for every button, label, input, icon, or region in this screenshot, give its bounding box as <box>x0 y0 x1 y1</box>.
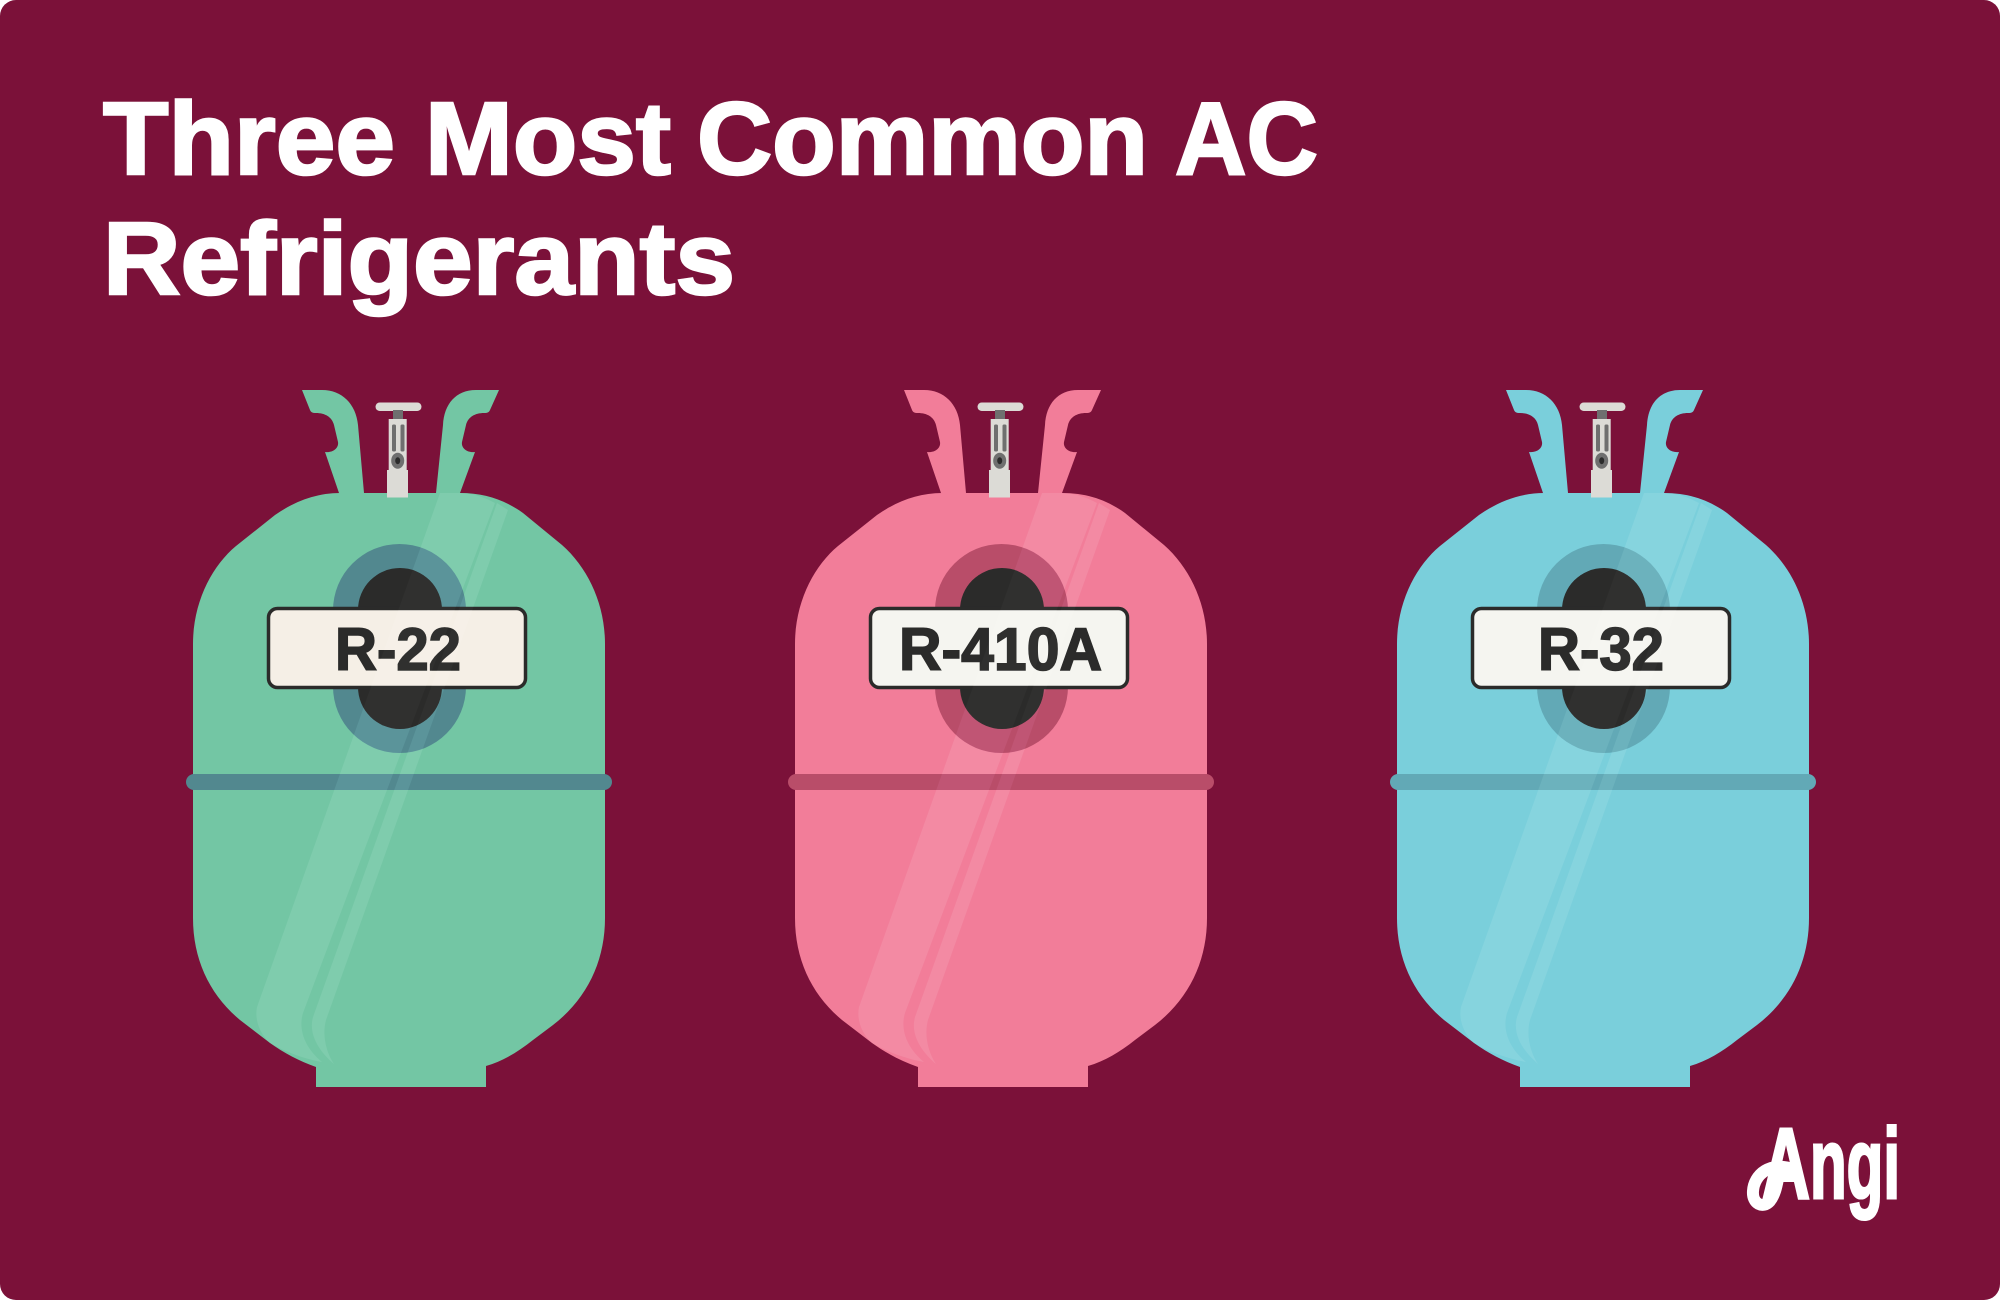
tank body <box>795 493 1207 1087</box>
centre band <box>186 774 612 790</box>
title: Common <box>697 81 1148 196</box>
logo: Angi: A <box>1762 1108 1810 1220</box>
label: R-32: R-32 <box>1538 616 1664 683</box>
tank handles <box>904 390 1101 493</box>
title: Most <box>425 81 671 196</box>
glass highlight <box>256 493 508 1064</box>
valve <box>1580 402 1626 498</box>
label: R-22: R-22 <box>335 616 461 683</box>
label: R-22 <box>268 608 526 688</box>
centre band <box>1390 774 1816 790</box>
tank: R-22 <box>186 390 612 1087</box>
tank: R-410A <box>788 390 1214 1087</box>
tank: R-32 <box>1390 390 1816 1087</box>
tank handles <box>1506 390 1703 493</box>
label: R-410A: R-410A <box>899 616 1102 683</box>
logo: Angi: ngi <box>1810 1108 1900 1220</box>
title: Three <box>103 81 395 196</box>
title: AC <box>1175 81 1318 196</box>
tank body <box>1397 493 1809 1087</box>
glass highlight <box>858 493 1110 1064</box>
glass highlight <box>1460 493 1712 1064</box>
tank handles <box>302 390 499 493</box>
label: R-32 <box>1472 608 1730 688</box>
valve <box>978 402 1024 498</box>
tank body <box>193 493 605 1087</box>
title: Refrigerants <box>103 201 735 316</box>
gauge opening <box>333 544 466 753</box>
label: R-410A <box>870 608 1128 688</box>
title <box>103 81 1318 316</box>
gauge opening <box>935 544 1068 753</box>
logo: Angi <box>1753 1108 1900 1220</box>
centre band <box>788 774 1214 790</box>
gauge opening <box>1537 544 1670 753</box>
valve <box>376 402 422 498</box>
